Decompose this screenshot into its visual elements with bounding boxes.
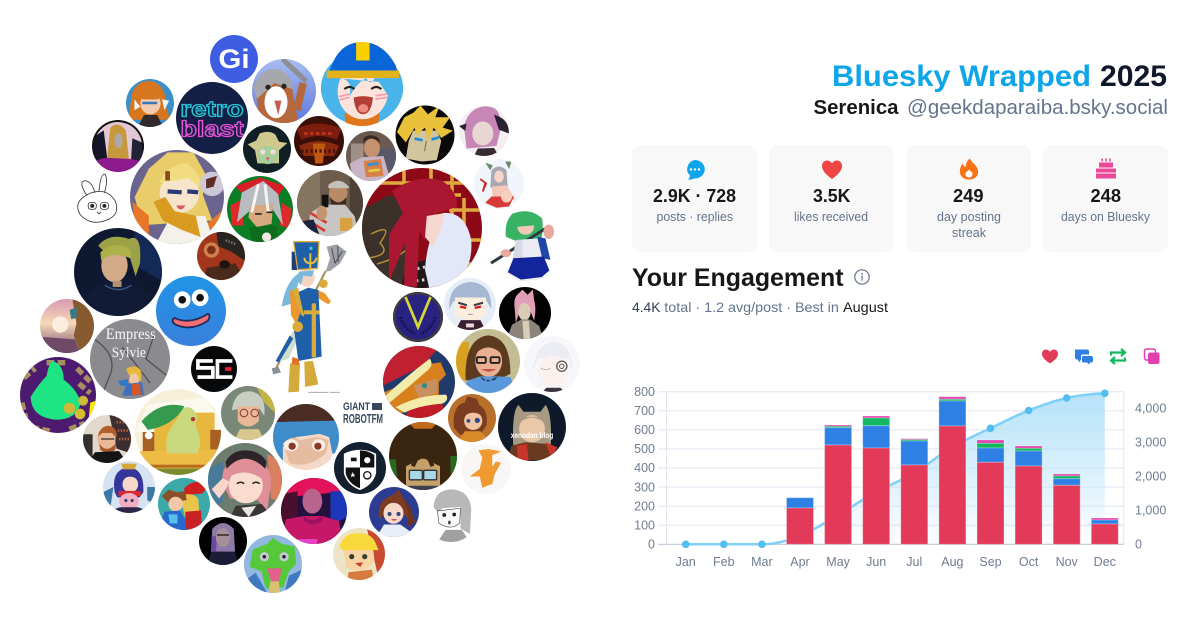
avatar: green haired pixel shrine maiden [491,211,554,281]
avatar: otter knight [252,59,316,123]
bar: Oct [1015,446,1042,544]
legend: replies bubbles [1075,350,1093,364]
avatar: Empress Sylvie: Sylvie [112,344,146,361]
avatar: retroblast neon logo: retro [180,97,244,122]
panel: stats cards [632,145,1168,252]
avatar: grey haired girl with glasses [221,386,275,440]
card: posting streak: streak [952,225,986,240]
card: posting streak: 249 [953,186,984,206]
avatar: Chikorita on sofa [135,389,221,475]
x axis month labels [676,555,1116,569]
text logo: Giant Robot FM [343,401,383,426]
avatar: man with comics [346,131,396,181]
avatar: blue haired pixel girl [273,404,339,470]
x axis month labels: Jan [676,555,696,569]
card: posting streak: day posting [937,209,1001,224]
avatar: orange mascot [461,444,511,494]
avatar: pale pixel face with red eyes [444,278,496,330]
right y axis labels: 1,000 [1135,504,1166,518]
bar: Aug [939,397,966,544]
x axis month labels: Nov [1056,555,1079,569]
avatar: manga sketch girl [434,489,472,542]
avatar: red haired couple embracing [362,168,482,288]
header: title: 2025 [1100,60,1167,93]
bar: Dec [1091,518,1118,544]
avatar: brown ponytail anime girl [369,487,419,537]
heading: Your Engagement: Your Engagement [632,264,844,292]
x axis month labels: Oct [1019,555,1039,569]
avatar: glowing green slime on purple [20,357,96,433]
avatar: retroblast neon logo: blast [180,117,244,142]
chart: monthly engagement stacked bars with cumulative line [634,385,1166,569]
left y axis labels: 400 [634,461,655,475]
x axis month labels: Sep [979,555,1002,569]
panel: avatar bubble cloud [20,35,580,593]
bar: Jul [901,439,928,544]
avatar: grey haired horned girl [474,159,524,209]
avatar: SE logo [191,346,237,392]
card: posts and replies: posts · replies [656,209,733,224]
avatar: close up dog face [197,232,245,280]
avatar: blue slime [156,276,226,346]
avatar: Toon Link [333,528,385,580]
left y axis labels: 600 [634,423,655,437]
header: name and handle: Serenica [814,97,899,119]
bar: May [825,425,852,544]
x axis month labels: Dec [1094,555,1116,569]
avatar: orange haired girl [126,79,174,127]
avatar: retroblast neon logo [176,82,248,154]
avatar: pink haired figure on black [499,287,551,339]
legend: likes heart [1042,350,1058,364]
icon: info [855,270,869,284]
card: likes received: 3.5K [813,186,850,206]
header: name and handle: @geekdaparaiba.bsky.social [907,97,1168,119]
avatar: pink haired peace sign girl [208,443,282,517]
left y axis labels [634,385,655,552]
bar: Apr [786,498,814,544]
avatar: Megaman heroes [158,478,210,530]
avatar: blue haired girl with hat [320,42,404,126]
avatar: selfie man with cap [297,170,363,236]
left y axis labels: 0 [648,538,655,552]
avatar: Gi logo [210,35,258,83]
avatar: xenodan blog: xenodan blog [511,431,553,440]
header: title: Bluesky Wrapped [832,60,1091,93]
avatar: Gi logo: Gi [218,44,250,74]
card: likes received [769,145,894,252]
avatar: blue haired girl with Kirby [103,461,155,513]
left y axis labels: 200 [634,500,655,514]
engagement summary line: August [843,299,888,315]
avatar: spiky blond hero [396,106,454,164]
left y axis labels: 800 [634,385,655,399]
avatar: woman in dark top [199,517,247,565]
avatar: blonde elf on purple ring [92,120,144,172]
avatar: Empress Sylvie [90,319,170,399]
avatar: pink haired horned girl [459,106,509,156]
avatar: dark haired character with blue glasses [389,422,457,490]
avatar: xenodan blog [498,393,566,461]
x axis month labels: Aug [941,555,964,569]
avatar: blonde girl with golden gauntlet [130,150,224,244]
x axis month labels: Apr [790,555,810,569]
center character: priest with mace [272,242,347,392]
avatar: Empress Sylvie: Empress [106,326,156,343]
x axis month labels: Feb [713,555,735,569]
icon: flame [960,158,978,180]
icon: birthday cake [1096,158,1116,178]
chart grid [658,392,1124,544]
avatar: SE logo: SE [214,368,215,369]
avatar: pale girl with spiral eye [524,336,580,392]
avatar: green dragon digimon [244,535,302,593]
x axis month labels: Jul [906,555,922,569]
left y axis labels: 500 [634,442,655,456]
right y axis labels [1135,402,1166,552]
card: days on Bluesky: 248 [1090,186,1121,206]
text logo: Giant Robot FM: GIANT [343,401,370,413]
engagement summary line: total · 1.2 avg/post · Best in [664,299,839,315]
left y axis labels: 100 [634,518,655,532]
legend: reposts arrows [1111,349,1125,364]
left y axis labels: 300 [634,480,655,494]
card: days on Bluesky [1043,145,1168,252]
icon: speech bubble [687,160,705,180]
card: likes received: likes received [794,209,868,224]
avatar: black and white shield crest [334,442,386,494]
avatar: sketched bunny with glasses [78,174,117,222]
avatar: dark red ornament [294,116,344,166]
avatar: V laurel crest [393,292,443,342]
card: posts and replies: 2.9K · 728 [653,186,736,206]
cumulative area fill [762,393,1105,544]
x axis line [658,543,1124,545]
card: posting streak [906,145,1031,252]
avatar: green chibi elf [243,125,291,173]
x axis month labels: Jun [866,555,886,569]
card: posts and replies [632,145,757,252]
avatar: white haired warrior on red and green [227,176,293,242]
bar: Jun [863,416,890,544]
card: days on Bluesky: days on Bluesky [1061,209,1150,224]
right y axis labels: 4,000 [1135,402,1166,416]
avatar: 3D blonde character in dark hood [74,228,162,316]
bar: Sep [977,440,1004,544]
chart legend icons [1042,349,1160,364]
avatar: landscape with cliff climber [40,299,94,353]
engagement summary line [632,299,888,315]
right y axis labels: 3,000 [1135,436,1166,450]
cumulative line [686,393,1105,544]
line markers [682,390,1109,548]
right y axis labels: 2,000 [1135,470,1166,484]
left y axis labels: 700 [634,404,655,418]
x axis month labels: May [826,555,851,569]
avatar: brown haired girl on orange [448,394,496,442]
bar: Nov [1053,474,1080,544]
avatar: ginger bearded man [83,415,131,463]
icon: heart [822,160,842,179]
right y axis labels: 0 [1135,538,1142,552]
avatar: santa hero with spiky hair [383,346,455,418]
avatar: man in red sweater with neon lights [281,478,347,544]
engagement summary line: 4.4K [632,299,661,315]
stacked bars [786,397,1118,544]
avatar: woman with glasses and blue hoodie [456,329,520,393]
legend: quotes squares [1144,349,1160,364]
text logo: Giant Robot FM: ROBOTFM [343,412,383,426]
x axis month labels: Mar [751,555,773,569]
